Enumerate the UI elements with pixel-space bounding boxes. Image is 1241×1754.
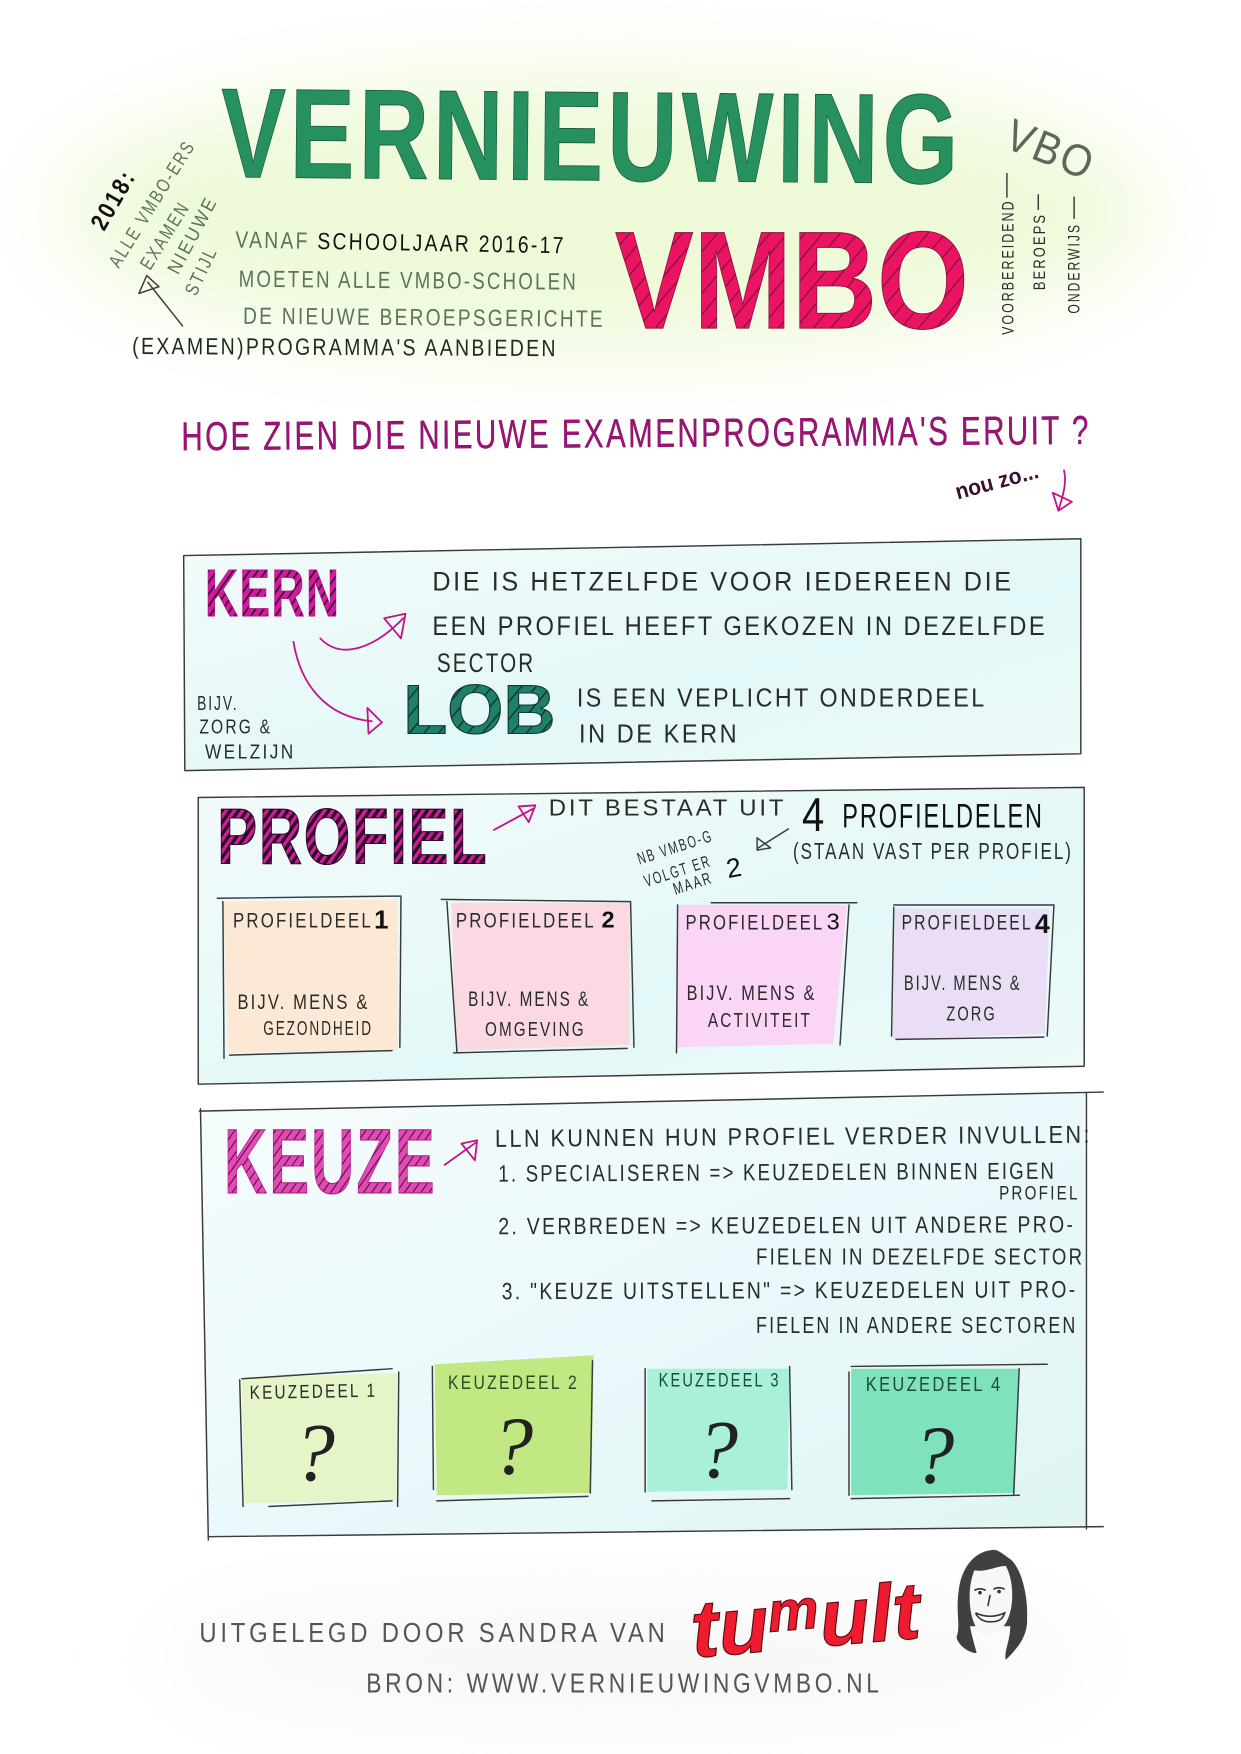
panel: profiel — [198, 787, 1084, 1084]
text: keuze options: 3. "KEUZE UITSTELLEN" => KEUZEDELEN UIT PRO- — [502, 1276, 1077, 1304]
box: profieldeel 4: BIJV. MENS & — [904, 971, 1021, 995]
side note: VBO: VOORBEREIDEND — [999, 199, 1018, 335]
box: keuzedeel 2: KEUZEDEEL 2 — [448, 1373, 579, 1394]
box: profieldeel 4: ZORG — [946, 1003, 997, 1025]
title: VMBO: VMBO — [615, 203, 969, 358]
box: keuzedeel 3: ? — [697, 1403, 738, 1495]
text: profieldelen: (STAAN VAST PER PROFIEL) — [793, 838, 1073, 864]
note: vmbo-g: 2 — [724, 851, 747, 884]
box: profieldeel 3 — [677, 903, 857, 1053]
text: kern description — [432, 566, 1047, 678]
side note: 2018: EXAMEN — [137, 198, 195, 274]
note: nou zo: nou zo... — [952, 458, 1041, 504]
intro text block: (EXAMEN)PROGRAMMA'S AANBIEDEN — [132, 333, 558, 361]
box: keuzedeel 4: ? — [913, 1409, 954, 1501]
box: profieldeel 2: PROFIELDEEL — [456, 908, 596, 932]
side note: VBO — [999, 110, 1103, 335]
logo: tumult: ult — [815, 1566, 927, 1664]
icon: portrait — [957, 1550, 1027, 1660]
note: vmbo-g: NB VMBO-G — [635, 826, 715, 868]
box: keuzedeel 1: ? — [293, 1407, 335, 1499]
box: keuzedeel 1: KEUZEDEEL 1 — [249, 1381, 378, 1404]
text: profieldelen: PROFIELDELEN — [842, 798, 1044, 836]
text: keuze options: 2. VERBREDEN => KEUZEDELEN UIT ANDERE PRO- — [498, 1211, 1075, 1239]
intro text block: VANAF SCHOOLJAAR 2016-17 — [235, 227, 566, 258]
intro text block: DE NIEUWE BEROEPSGERICHTE — [243, 303, 605, 332]
heading: KERN: KERN — [205, 556, 340, 631]
text: profieldelen: DIT BESTAAT UIT — [549, 794, 786, 820]
text: kern description: EEN PROFIEL HEEFT GEKOZEN IN DEZELFDE — [432, 611, 1047, 641]
side note: VBO: BEROEPS — [1030, 213, 1049, 290]
side note: 2018: 2018: — [86, 165, 142, 235]
box: profieldeel 4 — [892, 905, 1054, 1039]
box: profieldeel 1: GEZONDHEID — [263, 1018, 373, 1040]
box: keuzedeel 1 — [240, 1369, 399, 1506]
source: BRON: WWW.VERNIEUWINGVMBO.NL — [366, 1667, 883, 1698]
arrow: kern to LOB — [293, 642, 382, 734]
text: keuze options: FIELEN IN DEZELFDE SECTOR — [756, 1244, 1084, 1270]
text: keuze options: PROFIEL — [999, 1184, 1080, 1205]
heading: KEUZE: KEUZE — [224, 1111, 437, 1213]
side note: VBO: VBO — [999, 110, 1103, 190]
arrow: kern to description — [320, 614, 405, 650]
panel: keuze — [199, 1092, 1103, 1540]
text: keuze options: FIELEN IN ANDERE SECTOREN — [756, 1312, 1077, 1338]
box: profieldeel 2 — [441, 899, 634, 1053]
text: example zorg en welzijn: ZORG & — [199, 717, 272, 739]
panel: kern — [184, 539, 1081, 771]
intro text block — [132, 227, 605, 361]
box: keuzedeel 4: KEUZEDEEL 4 — [866, 1374, 1002, 1396]
box: profieldeel 1: 1 — [374, 907, 391, 935]
note: nou zo — [952, 458, 1072, 511]
note: vmbo-g: VOLGT ER — [642, 851, 714, 891]
text: LOB description — [577, 685, 987, 749]
arrow: keuze — [445, 1140, 477, 1165]
arrow: profiel — [494, 805, 535, 830]
box: profieldeel 3: ACTIVITEIT — [708, 1010, 812, 1032]
box: profieldeel 2: 2 — [601, 906, 617, 932]
box: profieldeel 4: PROFIELDEEL — [902, 911, 1033, 935]
box: profieldeel 1 — [217, 896, 401, 1058]
text: kern description: DIE IS HETZELFDE VOOR IEDEREEN DIE — [432, 566, 1014, 596]
side note: 2018: STIJL — [182, 243, 222, 299]
text: LOB description: IN DE KERN — [579, 721, 739, 749]
box: profieldeel 2: BIJV. MENS & — [468, 987, 590, 1011]
text: example zorg en welzijn: BIJV. — [197, 693, 239, 715]
box: profieldeel 3: PROFIELDEEL — [685, 911, 824, 935]
text: profieldelen: 4 — [802, 788, 827, 841]
side note: 2018 — [86, 137, 222, 299]
text: keuze options — [495, 1122, 1092, 1338]
box: keuzedeel 3: KEUZEDEEL 3 — [659, 1371, 781, 1392]
box: keuzedeel 4 — [849, 1364, 1047, 1501]
note: vmbo-g — [635, 826, 747, 899]
box: profieldeel 2: OMGEVING — [485, 1019, 586, 1041]
intro text block: MOETEN ALLE VMBO-SCHOLEN — [239, 266, 578, 295]
box: profieldeel 1: PROFIELDEEL — [233, 908, 373, 932]
box: profieldeel 1: BIJV. MENS & — [237, 990, 370, 1014]
text: keuze options: LLN KUNNEN HUN PROFIEL VERDER INVULLEN: — [495, 1122, 1092, 1153]
box: profieldeel 4: 4 — [1035, 909, 1053, 939]
text: keuze options: 1. SPECIALISEREN => KEUZEDELEN BINNEN EIGEN — [498, 1158, 1056, 1187]
side note: 2018: ALLE VMBO-ERS — [105, 137, 200, 271]
heading: LOB: LOB — [403, 671, 556, 749]
logo: tumult: m — [765, 1577, 821, 1644]
box: profieldeel 3: 3 — [827, 909, 842, 935]
logo: tumult — [687, 1566, 927, 1676]
text: kern description: SECTOR — [437, 648, 535, 678]
text: LOB description: IS EEN VEPLICHT ONDERDEEL — [577, 685, 987, 713]
footer credit: UITGELEGD DOOR SANDRA VAN — [199, 1617, 669, 1648]
box: keuzedeel 2: ? — [492, 1400, 533, 1492]
box: profieldeel 3: BIJV. MENS & — [687, 981, 817, 1005]
text: example zorg en welzijn: WELZIJN — [205, 741, 296, 763]
side note: VBO: ONDERWIJS — [1065, 223, 1084, 314]
side note: 2018: NIEUWE — [164, 193, 222, 278]
text: profieldelen — [549, 788, 1073, 864]
arrow: note to profieldelen — [757, 829, 789, 850]
heading: PROFIEL: PROFIEL — [217, 793, 488, 881]
logo: tumult: tu — [687, 1579, 771, 1676]
note: vmbo-g: MAAR — [671, 868, 715, 899]
title: VERNIEUWING: VERNIEUWING — [220, 62, 963, 211]
arrow: 2018 note — [139, 276, 183, 326]
box: keuzedeel 2 — [432, 1355, 594, 1501]
box: keuzedeel 3 — [645, 1366, 792, 1501]
text: example zorg en welzijn — [197, 693, 296, 763]
